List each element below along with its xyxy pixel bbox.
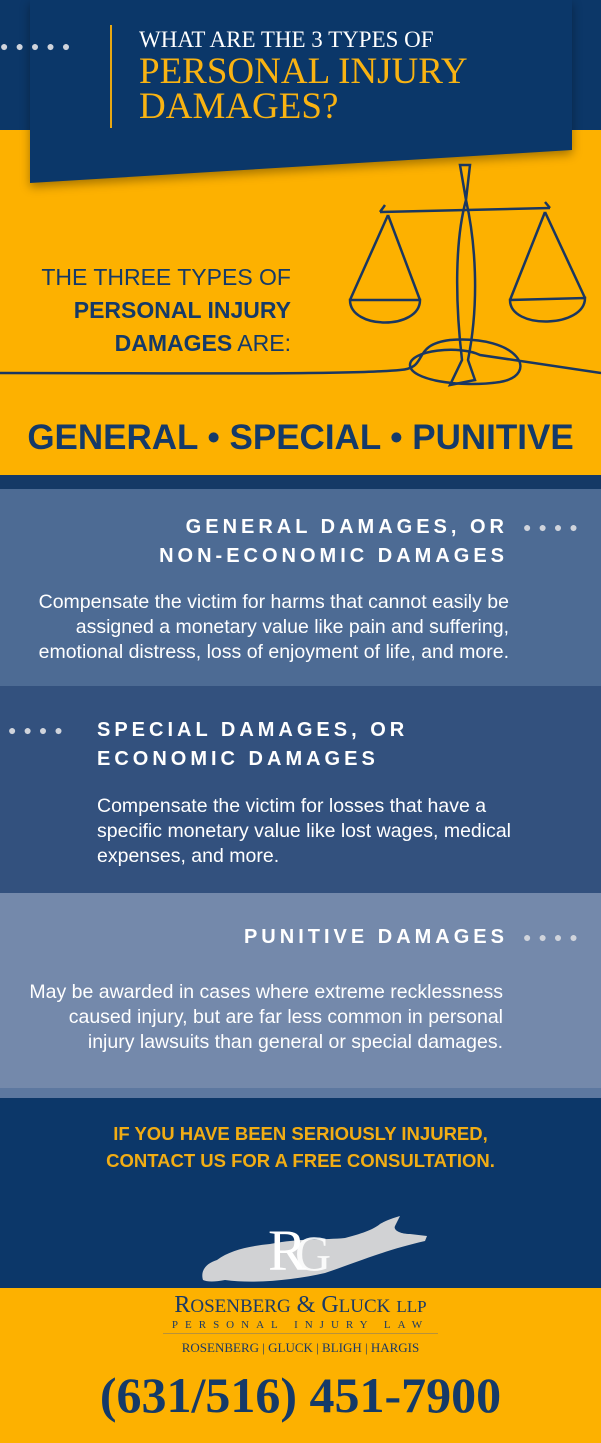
panel: special damages: ECONOMIC DAMAGES: [97, 748, 379, 770]
panel: special damages: Compensate the victim for losses that have a: [97, 795, 486, 817]
subtitle: DAMAGES ARE:: [115, 330, 291, 356]
panel: special damages: SPECIAL DAMAGES, OR: [97, 719, 408, 741]
title: PERSONAL INJURY: [139, 51, 468, 92]
panel: general damages: assigned a monetary value like pain and suffering,: [76, 616, 509, 638]
navy footer band: [0, 1088, 601, 1098]
firm name: ROSENBERG | GLUCK | BLIGH | HARGIS: [182, 1340, 419, 1355]
divider band: [0, 475, 601, 489]
headline: general special punitive: GENERAL • SPECIAL • PUNITIVE: [27, 418, 574, 457]
panel: general damages: Compensate the victim for harms that cannot easily be: [39, 591, 509, 613]
icon: scales of justice: [0, 164, 601, 387]
panel: special damages: expenses, and more.: [97, 845, 279, 867]
panel: punitive damages: May be awarded in cases where extreme recklessness: [29, 981, 503, 1003]
call to action: CONTACT US FOR A FREE CONSULTATION.: [106, 1150, 495, 1171]
title panel: [24, 4, 578, 192]
call to action: [106, 1123, 495, 1171]
panel: punitive damages: [0, 893, 601, 1088]
top navy band: [0, 0, 601, 130]
panel: special damages: [0, 686, 601, 893]
panel: general damages: [0, 489, 601, 686]
logo: island with RG: [202, 1216, 427, 1283]
phone number: (631/516) 451-7900: [100, 1367, 501, 1423]
subtitle: THE THREE TYPES OF: [41, 264, 291, 290]
panel: general damages: ●●●●: [523, 519, 585, 535]
panel: general damages: NON-ECONOMIC DAMAGES: [159, 545, 508, 567]
panel: special damages: specific monetary value like lost wages, medical: [97, 820, 511, 842]
firm name: [163, 1292, 438, 1355]
logo: island with RG: R: [268, 1218, 307, 1283]
subtitle: PERSONAL INJURY: [74, 297, 291, 323]
panel: special damages: ●●●●: [8, 722, 70, 738]
logo: island with RG: G: [295, 1225, 331, 1281]
dots decoration: ●●●●●: [0, 38, 77, 54]
firm name: PERSONAL INJURY LAW: [172, 1319, 429, 1331]
panel: general damages: GENERAL DAMAGES, OR: [186, 516, 508, 538]
subtitle: [41, 264, 291, 356]
firm name: ROSENBERG & GLUCK LLP: [174, 1292, 427, 1318]
panel: punitive damages: PUNITIVE DAMAGES: [244, 926, 508, 948]
title: WHAT ARE THE 3 TYPES OF: [139, 27, 434, 52]
panel: punitive damages: injury lawsuits than general or special damages.: [88, 1031, 503, 1053]
panel: general damages: emotional distress, loss of enjoyment of life, and more.: [39, 641, 509, 663]
title accent bar: [110, 25, 112, 128]
title: [139, 27, 468, 127]
title: DAMAGES?: [139, 86, 338, 127]
call to action: IF YOU HAVE BEEN SERIOUSLY INJURED,: [113, 1123, 488, 1144]
panel: punitive damages: caused injury, but are far less common in personal: [69, 1006, 503, 1028]
panel: punitive damages: ●●●●: [523, 929, 585, 945]
